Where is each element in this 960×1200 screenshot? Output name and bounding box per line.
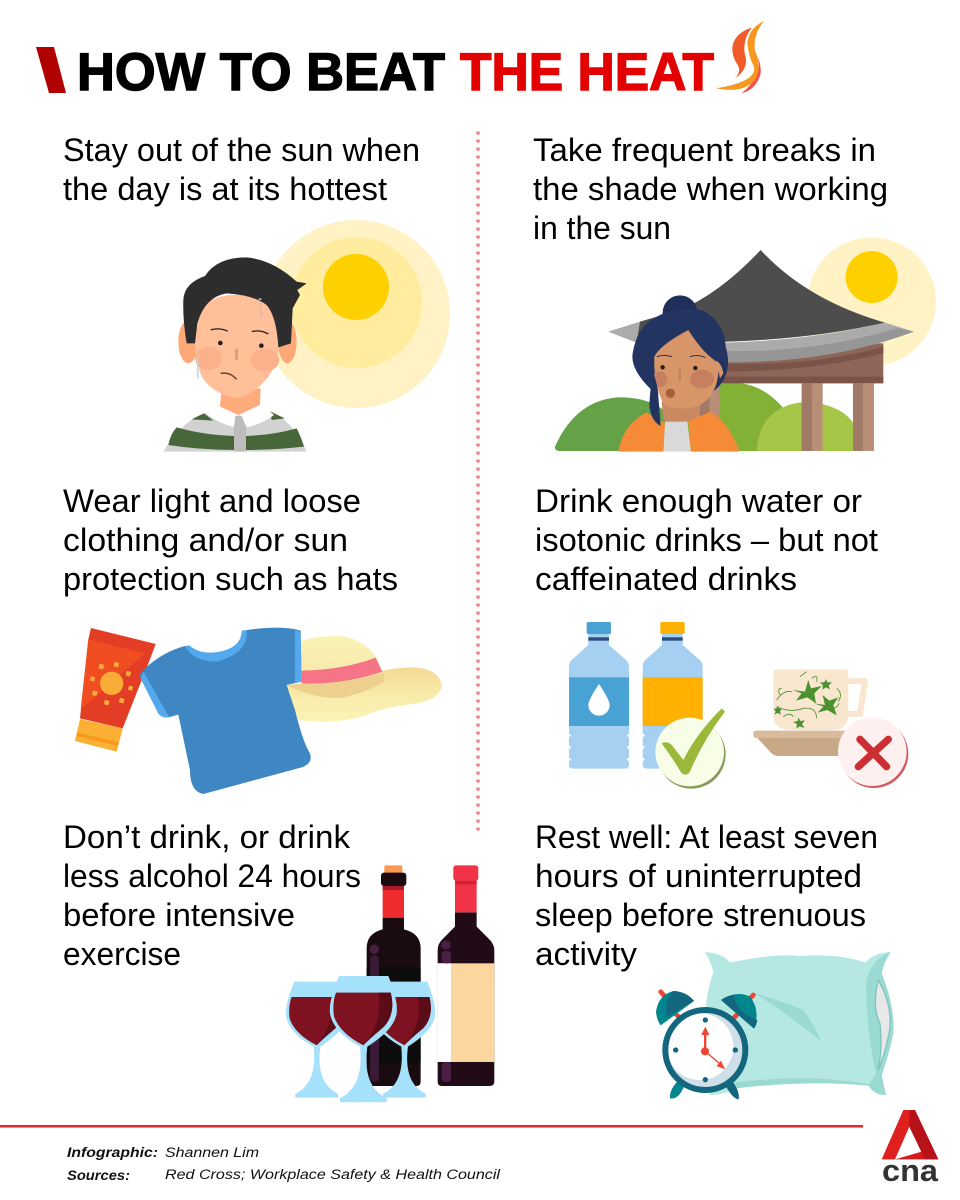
logo mark — [882, 1110, 938, 1159]
credits: Red Cross; Workplace Safety & Health Council — [165, 1167, 501, 1182]
icon: sun — [262, 220, 450, 408]
credits: Infographic: — [67, 1145, 158, 1160]
icon: red slash — [36, 47, 66, 93]
icon: wine glass centre — [330, 976, 397, 1102]
text: stay out of the sun: Stay out of the sun when — [63, 132, 420, 168]
text: rest well: hours of uninterrupted — [535, 858, 862, 894]
text: stay out of the sun: the day is at its hottest — [63, 171, 387, 207]
footer rule — [0, 1125, 863, 1128]
credits: Shannen Lim — [165, 1145, 259, 1160]
panel: rest well — [535, 819, 893, 1099]
text: take breaks — [533, 132, 888, 246]
text: drink enough water: caffeinated drinks — [535, 561, 797, 597]
icon: tea cup — [773, 669, 865, 730]
icon: pillow and alarm clock — [656, 952, 893, 1099]
icon: wine bottle left — [367, 865, 421, 1086]
logo wordmark: cna — [882, 1153, 939, 1188]
text: rest well: Rest well: At least seven — [535, 819, 878, 855]
text: rest well: activity — [535, 936, 637, 972]
icon: wine bottles and glasses — [286, 865, 494, 1102]
title — [36, 43, 714, 102]
dotted divider — [476, 133, 480, 830]
icon: wine bottle right — [438, 865, 494, 1086]
icon: pillow — [705, 952, 893, 1095]
text: take breaks: in the sun — [533, 210, 671, 246]
text: do not drink alcohol: before intensive — [63, 897, 295, 933]
icon: pavilion with sun and hills — [555, 237, 936, 451]
text: wear light clothing: clothing and/or sun — [63, 522, 348, 558]
text: do not drink alcohol: less alcohol 24 hours — [63, 858, 361, 894]
text: wear light clothing: Wear light and loose — [63, 483, 361, 519]
icon: tube, t-shirt and hat — [75, 628, 442, 794]
icon: straw hat — [287, 636, 442, 722]
credits: Sources: — [67, 1168, 130, 1183]
panel: alcohol — [63, 819, 494, 1102]
text: drink enough water — [535, 483, 878, 597]
icon: flame — [716, 21, 764, 93]
text: stay out of the sun — [63, 132, 420, 207]
text: do not drink alcohol — [63, 819, 361, 972]
icon: water bottle — [567, 622, 631, 769]
icon: isotonic bottle — [641, 622, 703, 769]
text: wear light clothing: protection such as hats — [63, 561, 398, 597]
icon: sweating man — [163, 257, 307, 452]
text: drink enough water: isotonic drinks – but not — [535, 522, 878, 558]
icon: wine glass left — [286, 982, 347, 1098]
icon: check mark — [655, 708, 726, 789]
panel: stay out of the sun — [63, 132, 450, 452]
text: do not drink alcohol: exercise — [63, 936, 181, 972]
text: take breaks: Take frequent breaks in — [533, 132, 876, 168]
icon: alarm clock — [656, 991, 757, 1099]
text: take breaks: the shade when working — [533, 171, 888, 207]
heading: the heat: THE HEAT — [460, 43, 714, 102]
text: wear light clothing — [63, 483, 398, 597]
icon: saucer — [753, 731, 850, 756]
logo: cna — [882, 1110, 939, 1188]
icon: cross mark — [838, 717, 908, 788]
text: rest well — [535, 819, 878, 972]
panel: drink water — [535, 483, 908, 789]
panel: take breaks in the shade — [533, 132, 936, 452]
icon: bottles, tea cup and marks — [567, 622, 908, 789]
icon: wine glass right — [374, 982, 435, 1098]
icon: woman with hair bun — [618, 295, 739, 452]
credits — [67, 1145, 501, 1183]
text: do not drink alcohol: Don’t drink, or drink — [63, 819, 351, 855]
icon: sunscreen tube — [75, 628, 156, 752]
icon: blue t-shirt — [140, 628, 311, 794]
text: drink enough water: Drink enough water or — [535, 483, 862, 519]
text: rest well: sleep before strenuous — [535, 897, 866, 933]
panel: light clothing — [63, 483, 442, 794]
heading: how to beat: HOW TO BEAT — [77, 43, 445, 102]
